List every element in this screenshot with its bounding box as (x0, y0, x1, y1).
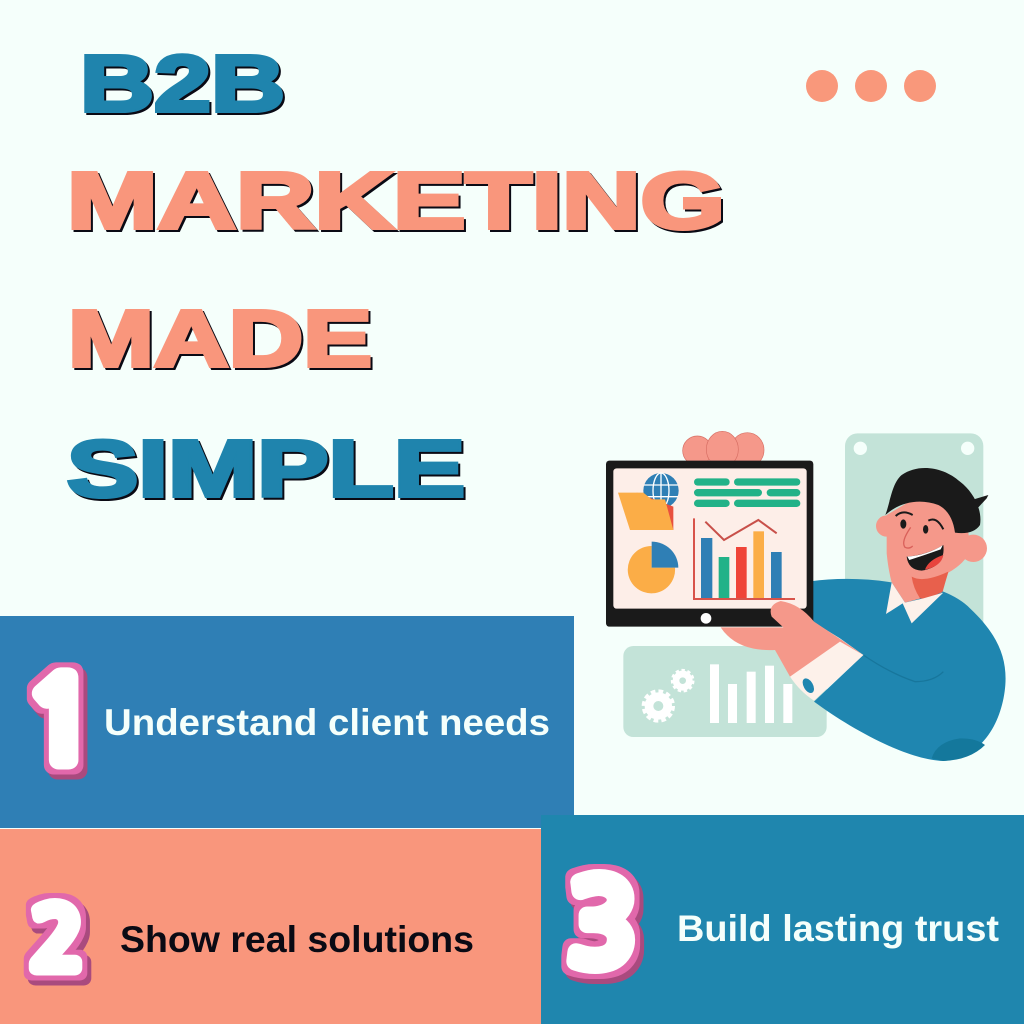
shirt collar (886, 582, 943, 623)
number 1 badge: 1 (25, 666, 97, 778)
ears (876, 515, 987, 562)
tablet screen (613, 468, 807, 609)
bar chart with trend line (694, 518, 795, 599)
step 3 label: Build lasting trust (677, 908, 999, 949)
home button (701, 613, 711, 624)
white bars (710, 664, 792, 723)
step 2 label: Show real solutions (120, 919, 474, 960)
globe icon (643, 473, 679, 508)
chin shadow (912, 572, 948, 599)
step 3 panel (541, 815, 1024, 1024)
man body in blue sweater (810, 579, 1006, 761)
title (67, 39, 725, 513)
face and neck (887, 493, 971, 603)
illustration: man holding tablet (606, 431, 1006, 761)
green text lines (694, 478, 800, 507)
title line: MARKETING: MARKETING (67, 156, 725, 245)
eyes and brows (896, 512, 943, 548)
step 2 panel (0, 829, 541, 1024)
number 3 badge: 3 (567, 868, 637, 983)
tablet (606, 461, 813, 627)
shirt cuff with button (790, 642, 863, 701)
sleeve crease and elbow shading (863, 655, 985, 761)
title line: MADE: MADE (68, 294, 372, 383)
top fingers (683, 431, 764, 467)
step 1 panel (0, 616, 574, 828)
gear icon small (672, 670, 693, 691)
title line: B2B: B2B (80, 39, 285, 128)
number 2 badge: 2 (30, 898, 84, 982)
title line: SIMPLE: SIMPLE (67, 424, 465, 513)
lower panel with gears and bars (623, 646, 827, 737)
holding hand and thumb (721, 601, 863, 700)
folder icon (618, 493, 673, 530)
step 1 label: Understand client needs (104, 702, 550, 743)
back panel with pins (845, 433, 983, 640)
open mouth (907, 545, 944, 571)
gear icon large (644, 691, 673, 721)
three decorative dots (806, 70, 936, 102)
hair (885, 468, 988, 533)
pie chart (628, 542, 678, 593)
